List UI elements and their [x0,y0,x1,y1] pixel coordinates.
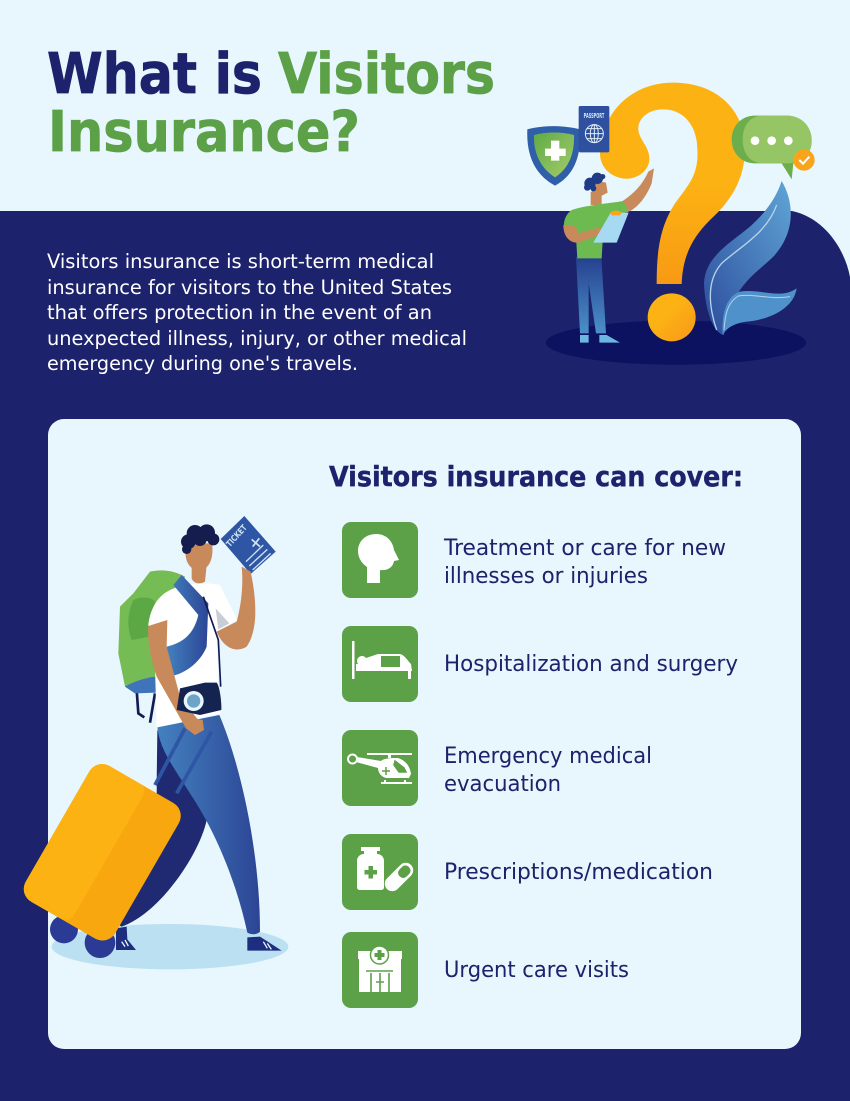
list item: urgent care [342,932,629,1008]
person with clipboard [563,168,654,343]
title: Visitors [278,42,495,107]
backpack straps [137,690,155,723]
icon: speech bubble [732,116,815,179]
icon: passport [579,106,609,152]
icon: shield [527,126,580,186]
shoes [116,927,282,951]
ground [52,924,288,969]
list item: evacuation: Emergency medical [444,743,652,769]
trolley handle [155,728,212,793]
intro paragraph: emergency during one's travels. [47,352,358,375]
list item: evacuation [342,730,652,806]
torso [148,583,237,727]
illustration: question mark with person [527,83,815,365]
hand [186,717,204,735]
heading: Visitors insurance can cover: [329,461,743,493]
illustration: traveler with suitcase [18,516,288,969]
title [47,42,495,165]
wheels [50,915,78,943]
list item: hospitalization [342,626,738,702]
icon: medicine bottle and pill [357,847,416,894]
list item: treatment: illnesses or injuries [444,563,648,589]
icon: helicopter [348,753,412,784]
question mark [600,83,745,341]
list item: prescriptions: Prescriptions/medication [444,859,713,885]
list item: evacuation: evacuation [444,771,561,797]
intro paragraph: that offers protection in the event of an [47,301,432,324]
list item: treatment: Treatment or care for new [443,535,726,561]
backpack [118,570,185,693]
ticket: TICKET [225,523,250,549]
list item: hospitalization: Hospitalization and surgery [444,651,738,677]
ground shadow [546,321,806,365]
title: What is [47,42,262,107]
title: Insurance? [48,100,360,165]
icon: head [358,534,399,583]
list item: treatment [342,522,726,598]
suitcase [18,759,186,946]
leaves [704,181,797,335]
intro paragraph: Visitors insurance is short-term medical [47,250,434,273]
icon: passport: PASSPORT [584,112,605,120]
arm [148,620,203,735]
intro paragraph [47,250,467,375]
sling bag [167,575,208,677]
intro paragraph: insurance for visitors to the United States [47,276,452,299]
icon: clinic building [358,946,402,992]
camera [177,683,221,715]
ticket [221,516,276,574]
neck and head [192,565,207,583]
intro paragraph: unexpected illness, injury, or other medical [47,327,467,350]
panel: coverage card [18,419,801,1049]
list item: prescriptions [342,834,713,910]
raised arm [217,567,255,650]
list item: urgent care: Urgent care visits [444,957,629,983]
front leg [157,715,260,934]
icon: hospital bed [352,641,412,679]
back leg [110,730,207,927]
